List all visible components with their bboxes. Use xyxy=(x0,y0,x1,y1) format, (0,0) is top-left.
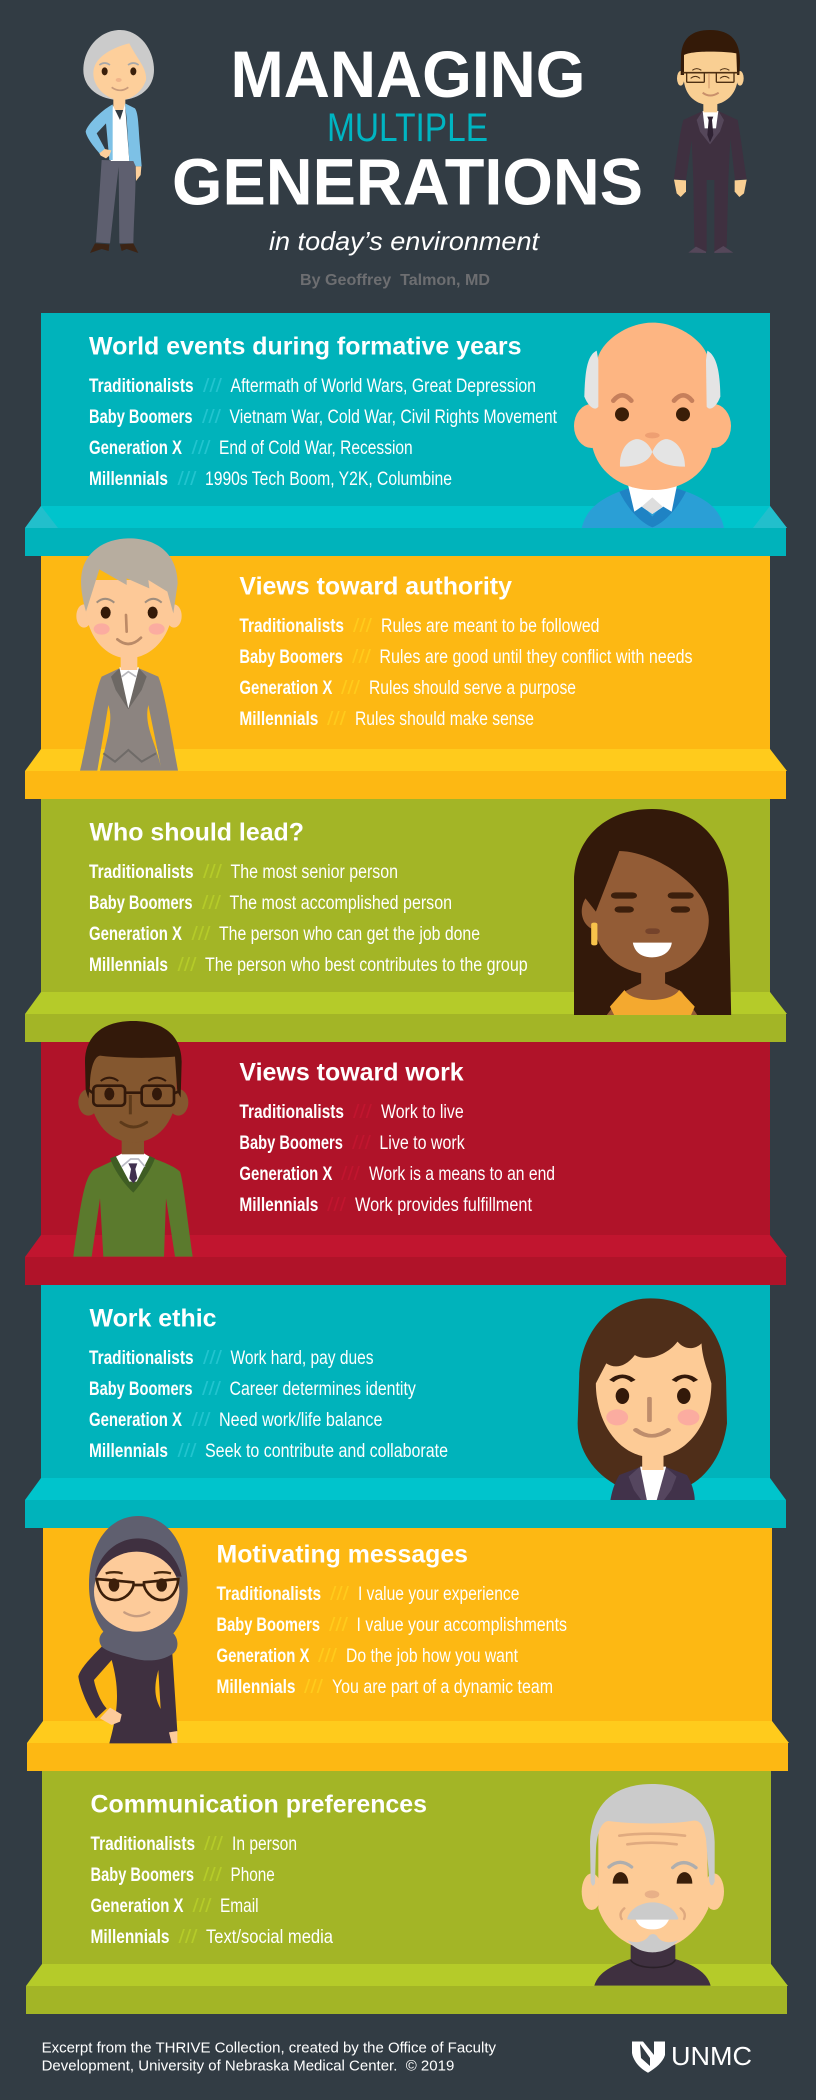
row: Traditionalists: Rules are meant to be followed xyxy=(381,616,600,637)
row: Baby Boomers: Baby Boomers xyxy=(89,893,192,914)
character: grey-haired woman in grey suit xyxy=(76,538,182,771)
row: Baby Boomers: Baby Boomers xyxy=(90,1865,194,1886)
row: Traditionalists xyxy=(239,616,600,637)
row: Traditionalists: /// xyxy=(203,1348,223,1369)
row: Traditionalists xyxy=(90,1834,297,1855)
row: Generation X: /// xyxy=(192,1896,212,1917)
panel background xyxy=(41,799,770,992)
row: Baby Boomers: Rules are good until they conflict with needs xyxy=(379,647,693,668)
heading: Views toward work xyxy=(239,1059,464,1087)
row: Baby Boomers: /// xyxy=(352,1133,372,1154)
row: Millennials: You are part of a dynamic team xyxy=(332,1677,553,1698)
row: Generation X: Generation X xyxy=(239,678,333,699)
row: Baby Boomers: Baby Boomers xyxy=(216,1615,320,1636)
character: woman with long dark hair xyxy=(574,809,731,1015)
panel: who should lead xyxy=(25,799,787,1042)
row: Traditionalists xyxy=(89,1348,374,1369)
row: Generation X: Generation X xyxy=(239,1164,333,1185)
row: Traditionalists xyxy=(216,1584,519,1605)
character: man with glasses in green sweater xyxy=(73,1021,193,1257)
panel: communication preferences xyxy=(26,1771,788,2014)
shelf front xyxy=(25,1257,786,1285)
row: Millennials: Millennials xyxy=(239,709,318,730)
row: Generation X: Rules should serve a purpose xyxy=(369,678,576,699)
title: Managing: MANAGING xyxy=(230,37,586,111)
character: woman with brown hair xyxy=(578,1298,727,1500)
panel: views toward work xyxy=(25,1021,787,1285)
row: Millennials: Millennials xyxy=(89,955,168,976)
row: Generation X: /// xyxy=(192,438,211,459)
shelf front xyxy=(25,1500,786,1528)
row: Baby Boomers: /// xyxy=(202,407,222,428)
row: Millennials: /// xyxy=(178,955,197,976)
row: Generation X: Do the job how you want xyxy=(346,1646,519,1667)
row: Generation X: Email xyxy=(220,1896,259,1917)
panel: work ethic xyxy=(25,1285,786,1528)
row: Generation X xyxy=(89,438,413,459)
subtitle: in today’s environment xyxy=(269,226,541,256)
panel background xyxy=(42,1771,771,1964)
row: Baby Boomers xyxy=(89,1379,416,1400)
heading: Communication preferences xyxy=(90,1791,427,1819)
row: Traditionalists: In person xyxy=(232,1834,297,1855)
byline: By Geoffrey Talmon, MD xyxy=(300,272,490,289)
row: Baby Boomers: Baby Boomers xyxy=(239,647,343,668)
row: Millennials xyxy=(89,469,452,490)
row: Millennials: /// xyxy=(178,469,197,490)
row: Traditionalists: /// xyxy=(203,862,223,883)
row: Millennials: /// xyxy=(327,1195,347,1216)
heading: Work ethic xyxy=(90,1305,217,1333)
row: Generation X: Generation X xyxy=(89,438,182,459)
shelf front xyxy=(25,528,786,556)
row: Millennials: Seek to contribute and collaborate xyxy=(205,1441,448,1462)
shelf top xyxy=(25,749,787,771)
row: Millennials: Millennials xyxy=(239,1195,318,1216)
shelf front xyxy=(26,1986,787,2014)
row: Millennials: Rules should make sense xyxy=(355,709,534,730)
character: woman in hijab with glasses xyxy=(78,1516,188,1743)
row: Traditionalists: Traditionalists xyxy=(89,376,194,397)
row: Generation X: Work is a means to an end xyxy=(369,1164,555,1185)
row: Traditionalists xyxy=(239,1102,464,1123)
row: Generation X: /// xyxy=(341,1164,361,1185)
row: Baby Boomers: /// xyxy=(203,1865,223,1886)
panel background xyxy=(41,313,770,506)
shelf top xyxy=(25,506,787,528)
row: Generation X xyxy=(216,1646,519,1667)
row: Baby Boomers: /// xyxy=(202,893,222,914)
row: Traditionalists: Traditionalists xyxy=(239,1102,344,1123)
heading: Motivating messages xyxy=(216,1541,468,1569)
panel: motivating messages xyxy=(27,1516,789,1771)
heading: Views toward authority xyxy=(239,573,512,601)
row: Baby Boomers: Baby Boomers xyxy=(89,407,192,428)
shelf front xyxy=(27,1743,788,1771)
shelf top xyxy=(26,1964,788,1986)
row: Baby Boomers: /// xyxy=(202,1379,222,1400)
row: Millennials: The person who best contributes to the group xyxy=(205,955,528,976)
row: Generation X: Need work/life balance xyxy=(219,1410,382,1431)
row: Generation X: End of Cold War, Recession xyxy=(219,438,413,459)
row: Traditionalists: Traditionalists xyxy=(89,862,194,883)
row: Generation X: /// xyxy=(341,678,361,699)
row: Millennials: /// xyxy=(304,1677,324,1698)
row: Millennials xyxy=(216,1677,553,1698)
row: Baby Boomers: Live to work xyxy=(379,1133,465,1154)
shelf corner left xyxy=(25,506,58,528)
heading: Who should lead? xyxy=(90,819,304,847)
row: Traditionalists: Aftermath of World Wars, Great Depression xyxy=(230,376,536,397)
row: Millennials xyxy=(90,1927,333,1948)
panel background xyxy=(41,556,770,749)
row: Traditionalists: Traditionalists xyxy=(239,616,344,637)
row: Millennials xyxy=(89,955,528,976)
row: Millennials: Millennials xyxy=(90,1927,170,1948)
panel background xyxy=(41,1285,770,1478)
row: Millennials: 1990s Tech Boom, Y2K, Columbine xyxy=(205,469,452,490)
character: older woman in blue cardigan xyxy=(83,30,154,253)
row: Baby Boomers xyxy=(89,407,558,428)
panel: world events during formative years xyxy=(25,313,787,556)
row: Generation X: Generation X xyxy=(90,1896,184,1917)
panel background xyxy=(43,1528,772,1721)
row: Baby Boomers: The most accomplished person xyxy=(230,893,452,914)
shelf corner right xyxy=(753,506,787,528)
row: Baby Boomers xyxy=(239,647,693,668)
row: Millennials xyxy=(89,1441,448,1462)
row: Millennials: Millennials xyxy=(89,469,168,490)
row: Baby Boomers: Phone xyxy=(230,1865,275,1886)
shelf top xyxy=(27,1721,789,1743)
row: Baby Boomers xyxy=(239,1133,465,1154)
shelf top xyxy=(25,992,787,1014)
character: bald man with moustache xyxy=(574,323,731,528)
footer credit text xyxy=(42,2041,497,2075)
row: Baby Boomers xyxy=(89,893,452,914)
row: Generation X: Generation X xyxy=(89,1410,182,1431)
row: Baby Boomers: I value your accomplishments xyxy=(356,1615,567,1636)
row: Generation X: /// xyxy=(192,1410,211,1431)
row: Traditionalists: /// xyxy=(204,1834,224,1855)
shelf front xyxy=(25,771,786,799)
panel background xyxy=(41,1042,770,1235)
row: Baby Boomers xyxy=(216,1615,567,1636)
row: Millennials: Work provides fulfillment xyxy=(355,1195,533,1216)
shelf top xyxy=(25,1235,787,1257)
row: Generation X: /// xyxy=(318,1646,338,1667)
row: Traditionalists: Traditionalists xyxy=(89,1348,194,1369)
row: Generation X: /// xyxy=(192,924,211,945)
character: older man with grey hair and beard xyxy=(582,1784,724,1986)
title block xyxy=(172,37,643,289)
row: Traditionalists: /// xyxy=(203,376,223,397)
row: Traditionalists: Work hard, pay dues xyxy=(230,1348,374,1369)
shelf top xyxy=(25,1478,786,1500)
row: Millennials: Millennials xyxy=(216,1677,296,1698)
row: Millennials xyxy=(239,709,534,730)
row: Millennials: Millennials xyxy=(89,1441,168,1462)
row: Generation X: The person who can get the job done xyxy=(219,924,480,945)
row: Generation X xyxy=(89,1410,382,1431)
row: Millennials: /// xyxy=(178,1927,198,1948)
title: Multiple: MULTIPLE xyxy=(327,106,488,150)
row: Baby Boomers: /// xyxy=(329,1615,349,1636)
footer credit text: Development, University of Nebraska Medical Center. © 2019 xyxy=(42,2059,454,2075)
logo: UNMC xyxy=(632,2041,752,2073)
row: Generation X: Generation X xyxy=(216,1646,310,1667)
row: Baby Boomers: /// xyxy=(352,647,372,668)
row: Traditionalists: /// xyxy=(353,1102,373,1123)
row: Generation X xyxy=(89,924,480,945)
row: Traditionalists xyxy=(89,862,398,883)
row: Millennials: /// xyxy=(327,709,347,730)
row: Baby Boomers: Baby Boomers xyxy=(239,1133,343,1154)
shelf front xyxy=(25,1014,786,1042)
footer credit text: Excerpt from the THRIVE Collection, created by the Office of Faculty xyxy=(42,2041,497,2057)
title: Generations: GENERATIONS xyxy=(172,144,643,218)
row: Baby Boomers: Career determines identity xyxy=(230,1379,416,1400)
character: man in dark suit xyxy=(674,30,747,253)
row: Millennials xyxy=(239,1195,533,1216)
row: Baby Boomers: Vietnam War, Cold War, Civil Rights Movement xyxy=(230,407,558,428)
row: Traditionalists: Traditionalists xyxy=(90,1834,195,1855)
panel: views toward authority xyxy=(25,538,787,799)
row: Traditionalists: /// xyxy=(330,1584,350,1605)
row: Generation X: Generation X xyxy=(89,924,182,945)
row: Traditionalists: The most senior person xyxy=(230,862,398,883)
icon: shield mark xyxy=(632,2042,665,2073)
row: Millennials: Text/social media xyxy=(206,1927,333,1948)
row: Traditionalists: Traditionalists xyxy=(216,1584,321,1605)
wordmark: UNMC xyxy=(671,2041,752,2071)
row: Traditionalists xyxy=(89,376,536,397)
row: Generation X xyxy=(239,678,576,699)
row: Millennials: /// xyxy=(178,1441,197,1462)
row: Baby Boomers: Baby Boomers xyxy=(89,1379,192,1400)
row: Generation X xyxy=(239,1164,555,1185)
row: Traditionalists: /// xyxy=(353,616,373,637)
row: Traditionalists: I value your experience xyxy=(358,1584,519,1605)
heading: World events during formative years xyxy=(89,332,522,360)
row: Traditionalists: Work to live xyxy=(381,1102,464,1123)
